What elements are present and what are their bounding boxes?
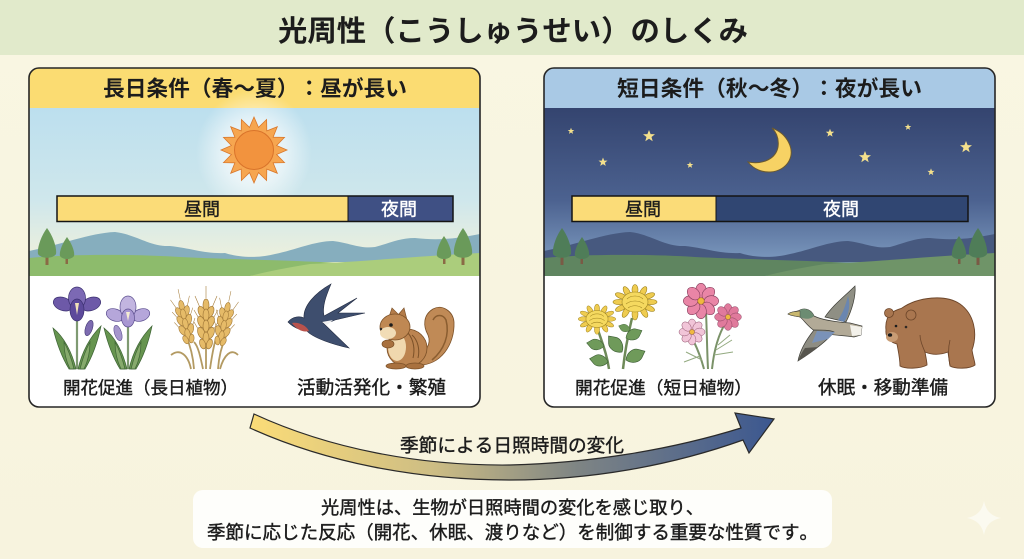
day length bar: short day: 昼間 bbox=[625, 200, 661, 220]
icon: stars bbox=[568, 124, 972, 175]
daytime sky bbox=[29, 108, 480, 276]
grass bbox=[544, 255, 855, 276]
trees left bbox=[38, 228, 74, 265]
illustration: bear bbox=[884, 298, 975, 368]
panel border bbox=[29, 68, 480, 407]
arrow label: 季節による日照時間の変化 bbox=[400, 435, 624, 456]
illustration: wheat bbox=[168, 286, 241, 369]
panel: short day conditions bbox=[544, 68, 995, 407]
illustration: irises bbox=[51, 287, 152, 369]
trees right bbox=[437, 228, 472, 265]
day length bar: long day bbox=[57, 196, 453, 222]
grass bbox=[29, 255, 340, 276]
trees right bbox=[952, 228, 987, 265]
panel border bbox=[544, 68, 995, 407]
callout: summary: 光周性は、生物が日照時間の変化を感じ取り、 bbox=[321, 498, 704, 518]
illustration: chrysanthemums bbox=[578, 284, 657, 369]
day length bar: short day bbox=[572, 196, 968, 222]
panel header: long day bbox=[29, 68, 480, 108]
mountains bbox=[29, 232, 480, 262]
trees left bbox=[553, 228, 589, 265]
illustration: swallow bbox=[288, 284, 365, 348]
title: 光周性（こうしゅうせい）のしくみ bbox=[278, 15, 748, 48]
icon: crescent moon bbox=[748, 128, 791, 172]
day length bar: long day: 昼間 bbox=[184, 200, 220, 220]
illustration: flying duck bbox=[788, 286, 862, 361]
panel header: short day bbox=[544, 68, 995, 108]
illustration: squirrel bbox=[380, 307, 454, 369]
title band bbox=[0, 0, 1024, 55]
mountains bbox=[544, 232, 995, 262]
panel heading: 短日条件（秋〜冬）：夜が長い bbox=[617, 76, 922, 101]
callout: summary: 季節に応じた反応（開花、休眠、渡りなど）を制御する重要な性質です。 bbox=[207, 522, 818, 543]
label: long day animals: 活動活発化・繁殖 bbox=[297, 377, 446, 398]
panel heading: 長日条件（春〜夏）：昼が長い bbox=[103, 76, 407, 101]
callout: summary bbox=[193, 490, 832, 548]
day length bar: long day: 夜間 bbox=[381, 200, 417, 220]
label: short day plants: 開花促進（短日植物） bbox=[575, 378, 752, 398]
illustration: cosmos bbox=[679, 283, 741, 369]
icon: sun bbox=[221, 117, 287, 183]
night sky bbox=[544, 108, 995, 276]
day length bar: short day: 夜間 bbox=[823, 200, 859, 220]
icon: sparkle bbox=[967, 501, 1001, 535]
panel: long day conditions bbox=[29, 68, 480, 407]
label: long day plants: 開花促進（長日植物） bbox=[63, 378, 238, 398]
arrow: seasonal change bbox=[250, 413, 774, 480]
label: short day animals: 休眠・移動準備 bbox=[818, 377, 948, 398]
